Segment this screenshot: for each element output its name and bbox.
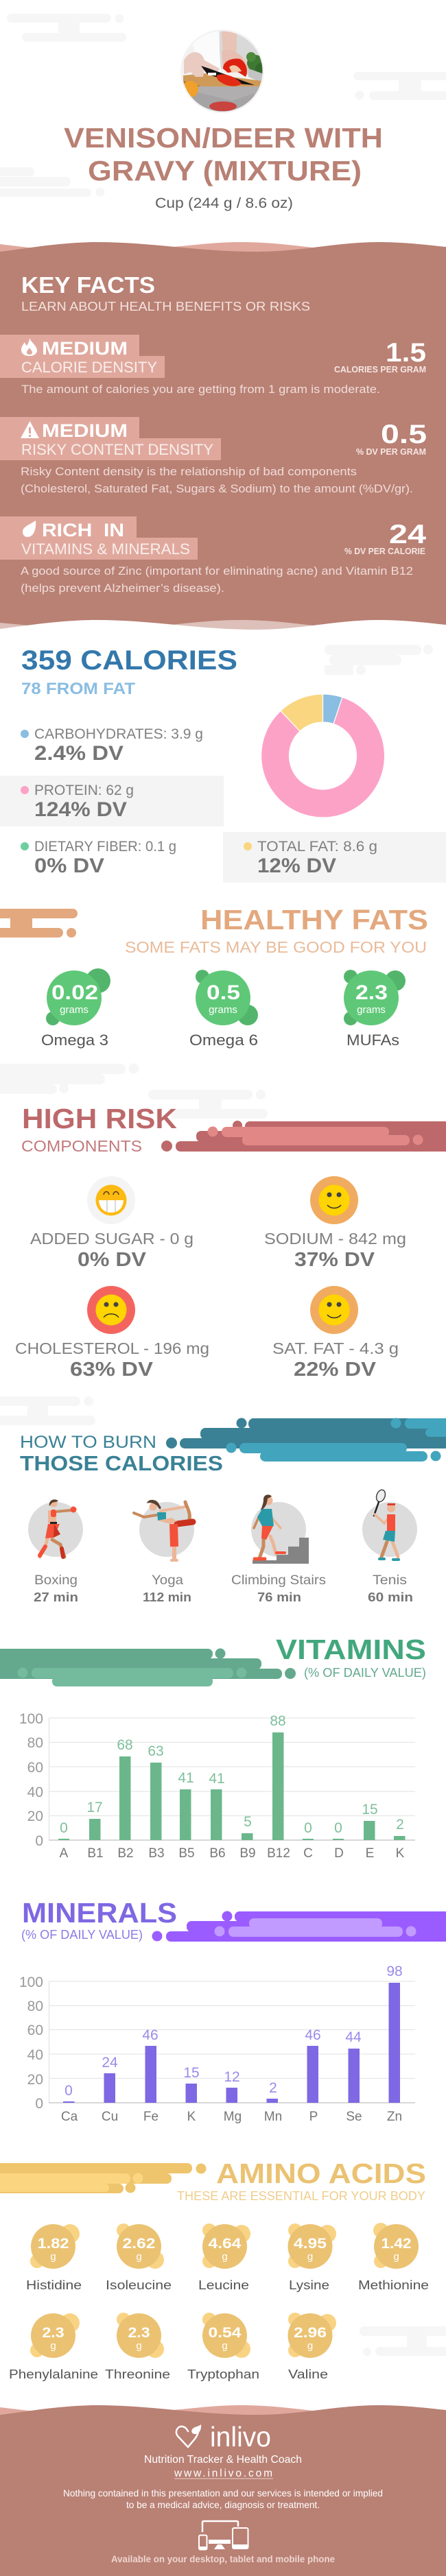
- healthy fats heading: SOME FATS MAY BE GOOD FOR YOU: [125, 938, 427, 956]
- bar chart: vitamins: 5: [244, 1814, 252, 1830]
- availability note: Available on your desktop, tablet and mobile phone: [111, 2553, 335, 2564]
- bar chart: minerals: Ca: [61, 2110, 78, 2124]
- icon: frowning face: [96, 1295, 126, 1325]
- healthy fats decoration: [0, 909, 78, 938]
- legend: total fat: [244, 839, 377, 877]
- omega 6 badge: 0.5: [207, 981, 240, 1004]
- bar chart: vitamins: [19, 1711, 415, 1861]
- bar chart: minerals: 100: [19, 1975, 43, 1990]
- amino: threonine: [105, 2313, 170, 2381]
- calories heading: 359 CALORIES: [21, 645, 237, 676]
- bar chart: vitamins: 63: [148, 1743, 164, 1759]
- panel: macronutrient legend: [0, 726, 446, 883]
- amino acids decoration: [0, 2163, 206, 2193]
- amino: histidine: g: [50, 2251, 56, 2263]
- amino: methionine: Methionine: [358, 2278, 429, 2292]
- bar chart: minerals: 60: [27, 2023, 43, 2038]
- bar chart: vitamins: B5: [178, 1846, 195, 1861]
- risk: sodium: SODIUM - 842 mg: [264, 1230, 406, 1248]
- bar chart: vitamins: B3: [148, 1846, 165, 1861]
- amino: phenylalanine: 2.3: [43, 2324, 64, 2341]
- legend: protein: [21, 783, 134, 821]
- bar chart: vitamins: 40: [27, 1785, 43, 1800]
- fact: risky content density: Risky Content density is the relationship of bad components: [21, 465, 357, 478]
- amino: lysine: [288, 2223, 336, 2292]
- panel: key facts: [0, 242, 446, 639]
- amino acids heading: AMINO ACIDS: [216, 2158, 426, 2189]
- amino: methionine: g: [393, 2251, 399, 2263]
- fact: calorie density: CALORIE DENSITY: [21, 359, 157, 376]
- amino: phenylalanine: g: [50, 2340, 56, 2352]
- high risk heading: COMPONENTS: [21, 1137, 142, 1155]
- vitamins decoration: [0, 1649, 296, 1686]
- risk: saturated fat: SAT. FAT - 4.3 g: [272, 1339, 399, 1357]
- fact: risky content density: [0, 417, 427, 495]
- icon: smiling face: [318, 1185, 350, 1215]
- bar chart: minerals: 0: [64, 2083, 73, 2099]
- amino: leucine: 4.64: [209, 2235, 242, 2252]
- amino: histidine: [26, 2224, 82, 2292]
- icon: yoga pose: [134, 1500, 193, 1560]
- risk: sodium: 37% DV: [294, 1249, 375, 1271]
- omega 3 badge: [41, 968, 110, 1049]
- key facts heading: LEARN ABOUT HEALTH BENEFITS OR RISKS: [21, 299, 310, 313]
- bar chart: vitamins: 0: [60, 1820, 68, 1836]
- panel: footer: [0, 2405, 446, 2576]
- minerals heading: (% OF DAILY VALUE): [21, 1928, 143, 1942]
- bar chart: vitamins: 68: [117, 1737, 133, 1753]
- disclaimer: [63, 2488, 383, 2510]
- bar chart: minerals: 12: [224, 2069, 240, 2085]
- bar chart: vitamins: B12: [267, 1846, 290, 1861]
- amino: leucine: [198, 2223, 250, 2292]
- legend: total fat: TOTAL FAT: 8.6 g: [257, 839, 377, 855]
- exercise: yoga: 112 min: [143, 1590, 191, 1604]
- vitamins heading: VITAMINS: [276, 1634, 426, 1665]
- burn calories heading: HOW TO BURN: [20, 1433, 156, 1452]
- exercise: tennis: [362, 1488, 417, 1604]
- amino: valine: 2.96: [294, 2324, 327, 2341]
- omega 6 badge: grams: [209, 1004, 237, 1016]
- amino acids heading: THESE ARE ESSENTIAL FOR YOUR BODY: [177, 2189, 425, 2203]
- bar chart: vitamins: 41: [209, 1771, 225, 1787]
- exercise: boxing: [28, 1499, 83, 1604]
- legend: carbohydrates: [21, 726, 203, 765]
- legend: dietary fiber: DIETARY FIBER: 0.1 g: [34, 839, 176, 855]
- bar chart: minerals: Fe: [143, 2110, 159, 2124]
- exercise: yoga: [134, 1500, 194, 1604]
- high risk decoration: [161, 1121, 446, 1152]
- disclaimer: to be a medical advice, diagnosis or treatment.: [126, 2499, 320, 2510]
- risk: cholesterol: CHOLESTEROL - 196 mg: [15, 1339, 209, 1357]
- exercise: climbing stairs: Climbing Stairs: [231, 1573, 326, 1588]
- omega 3 badge: 0.02: [51, 981, 98, 1004]
- risk: added sugar: ADDED SUGAR - 0 g: [30, 1230, 193, 1248]
- key facts heading: KEY FACTS: [21, 272, 155, 298]
- logo: inlivo: inlivo: [210, 2421, 271, 2453]
- bar chart: minerals: Cu: [102, 2110, 118, 2124]
- bar chart: vitamins: 80: [27, 1735, 43, 1751]
- amino: tryptophan: 0.54: [209, 2324, 242, 2341]
- fact: vitamins and minerals: VITAMINS & MINERALS: [21, 540, 190, 558]
- bar chart: minerals: 46: [142, 2027, 159, 2043]
- amino: valine: g: [307, 2340, 313, 2352]
- amino acids heading: [177, 2158, 426, 2203]
- amino: lysine: 4.95: [294, 2235, 327, 2252]
- disclaimer: Nothing contained in this presentation and our services is intended or implied: [63, 2488, 383, 2499]
- bar chart: minerals: 24: [102, 2055, 118, 2071]
- bar chart: vitamins: K: [396, 1846, 405, 1861]
- bar chart: vitamins: 2: [396, 1817, 404, 1833]
- icon: woman on stairs: [253, 1494, 309, 1564]
- legend: carbohydrates: 2.4% DV: [34, 742, 124, 765]
- MUFAs badge: [344, 970, 406, 1049]
- exercise: climbing stairs: 76 min: [257, 1590, 301, 1604]
- bar chart: minerals: 46: [305, 2027, 321, 2043]
- bar chart: minerals: 80: [27, 1999, 43, 2014]
- omega 3 badge: Omega 3: [41, 1031, 108, 1049]
- risk: saturated fat: [272, 1286, 399, 1381]
- icon: leaf: [23, 521, 36, 537]
- MUFAs badge: 2.3: [355, 981, 388, 1004]
- fact: vitamins and minerals: RICH IN: [42, 520, 124, 540]
- bar chart: minerals: Se: [346, 2110, 362, 2124]
- fact: vitamins and minerals: [0, 516, 426, 595]
- fact: vitamins and minerals: A good source of Zinc (important for eliminating acne) and Vitamin B12: [21, 564, 413, 577]
- amino: isoleucine: 2.62: [122, 2235, 156, 2252]
- exercise: climbing stairs: [231, 1494, 326, 1604]
- fact: risky content density: RISKY CONTENT DENSITY: [21, 441, 213, 458]
- icon: tennis player: [374, 1488, 399, 1560]
- exercise: yoga: Yoga: [152, 1573, 183, 1588]
- bar chart: minerals: 40: [27, 2047, 43, 2063]
- omega 3 badge: grams: [60, 1004, 89, 1016]
- icon: warning triangle: [21, 421, 39, 438]
- amino: phenylalanine: [9, 2313, 98, 2381]
- amino: threonine: Threonine: [105, 2367, 170, 2381]
- minerals heading: MINERALS: [22, 1897, 177, 1929]
- exercise: tennis: 60 min: [368, 1590, 413, 1604]
- bar chart: vitamins: B1: [87, 1846, 104, 1861]
- burn calories heading: [20, 1433, 223, 1475]
- bar chart: vitamins: E: [366, 1846, 374, 1861]
- healthy fats heading: HEALTHY FATS: [200, 904, 428, 935]
- bar chart: minerals: 44: [345, 2029, 362, 2045]
- amino: threonine: 2.3: [128, 2324, 150, 2341]
- tagline: Nutrition Tracker & Health Coach: [144, 2454, 302, 2466]
- amino: valine: Valine: [288, 2367, 328, 2381]
- exercise: boxing: Boxing: [34, 1573, 78, 1588]
- vitamins heading: (% OF DAILY VALUE): [304, 1666, 426, 1680]
- fact: vitamins and minerals: % DV PER CALORIE: [344, 546, 425, 556]
- icon: grinning face: [96, 1185, 126, 1215]
- amino: lysine: Lysine: [289, 2278, 329, 2292]
- amino: leucine: Leucine: [198, 2278, 249, 2292]
- risk: cholesterol: [15, 1286, 209, 1381]
- omega 6 badge: Omega 6: [189, 1031, 258, 1049]
- exercise: boxing: 27 min: [34, 1590, 78, 1604]
- title: GRAVY (MIXTURE): [88, 155, 362, 187]
- bar chart: vitamins: 0: [334, 1820, 342, 1836]
- bar chart: vitamins: 15: [362, 1802, 378, 1817]
- legend: protein: PROTEIN: 62 g: [34, 783, 134, 798]
- bar chart: vitamins: 20: [27, 1809, 43, 1824]
- bar chart: vitamins: 0: [304, 1820, 312, 1836]
- bar chart: vitamins: 88: [270, 1713, 286, 1729]
- bar chart: minerals: 2: [269, 2080, 277, 2096]
- amino: tryptophan: g: [222, 2340, 228, 2352]
- bar chart: vitamins: A: [60, 1846, 69, 1861]
- amino: valine: [288, 2313, 336, 2381]
- bar chart: vitamins: 41: [178, 1770, 194, 1786]
- high risk heading: HIGH RISK: [22, 1103, 177, 1134]
- amino: tryptophan: [187, 2313, 259, 2381]
- fact: risky content density: (Cholesterol, Saturated Fat, Sugars & Sodium) to the amount (%DV/gr).: [21, 482, 413, 495]
- fact: vitamins and minerals: 24: [389, 520, 426, 549]
- legend: dietary fiber: 0% DV: [34, 855, 104, 877]
- risk: sodium: [264, 1176, 406, 1271]
- food photo: [180, 29, 264, 113]
- key facts heading: [21, 272, 310, 313]
- burn calories heading: THOSE CALORIES: [20, 1451, 223, 1475]
- fact: vitamins and minerals: (helps prevent Alzheimer’s disease).: [21, 582, 224, 595]
- amino: tryptophan: Tryptophan: [187, 2367, 259, 2381]
- fact: risky content density: % DV PER GRAM: [356, 446, 426, 457]
- exercise: tennis: Tenis: [373, 1573, 407, 1588]
- amino: histidine: Histidine: [26, 2278, 82, 2292]
- bar chart: minerals: 20: [27, 2072, 43, 2088]
- fact: calorie density: The amount of calories you are getting from 1 gram is moderate.: [21, 383, 380, 396]
- fact: calorie density: MEDIUM: [42, 338, 128, 359]
- high risk heading: [21, 1103, 177, 1155]
- bar chart: vitamins: 0: [35, 1833, 43, 1849]
- bar chart: minerals: [19, 1964, 415, 2124]
- amino: threonine: g: [136, 2340, 142, 2352]
- amino: isoleucine: g: [136, 2251, 142, 2263]
- icon: smiling face: [318, 1295, 350, 1325]
- serving size: Cup (244 g / 8.6 oz): [155, 195, 293, 211]
- bar chart: minerals: P: [309, 2110, 318, 2124]
- icon: flame: [21, 338, 37, 356]
- bar chart: minerals: Mg: [224, 2110, 242, 2124]
- bar chart: minerals: 0: [35, 2096, 43, 2112]
- title: [64, 122, 383, 187]
- risk: saturated fat: 22% DV: [294, 1359, 377, 1381]
- title: VENISON/DEER WITH: [64, 122, 383, 154]
- legend: protein: 124% DV: [34, 798, 127, 821]
- risk: added sugar: 0% DV: [78, 1249, 147, 1271]
- bar chart: minerals: 98: [386, 1964, 403, 1979]
- fact: risky content density: MEDIUM: [42, 420, 128, 441]
- bar chart: vitamins: 60: [27, 1760, 43, 1776]
- bar chart: vitamins: 100: [19, 1711, 43, 1727]
- bar chart: vitamins: C: [303, 1846, 313, 1861]
- bar chart: minerals: Zn: [387, 2110, 402, 2124]
- amino: methionine: [358, 2223, 429, 2292]
- MUFAs badge: grams: [357, 1004, 386, 1016]
- amino: isoleucine: [106, 2223, 172, 2292]
- amino: histidine: 1.82: [37, 2235, 69, 2252]
- vitamins heading: [276, 1634, 426, 1680]
- amino: phenylalanine: Phenylalanine: [9, 2367, 98, 2381]
- risk: added sugar: [30, 1176, 193, 1271]
- omega 6 badge: [189, 970, 258, 1049]
- donut chart: [261, 694, 385, 818]
- website link: www.inlivo.com: [174, 2468, 272, 2479]
- minerals decoration: [152, 1911, 446, 1942]
- icon: boxer: [40, 1499, 77, 1557]
- bar chart: minerals: K: [187, 2110, 196, 2124]
- amino: leucine: g: [222, 2251, 228, 2263]
- bar chart: vitamins: B9: [239, 1846, 256, 1861]
- fact: calorie density: 1.5: [386, 338, 426, 368]
- amino: lysine: g: [307, 2251, 313, 2263]
- calories heading: 78 FROM FAT: [21, 680, 135, 698]
- fact: calorie density: CALORIES PER GRAM: [334, 364, 426, 374]
- amino: isoleucine: Isoleucine: [106, 2278, 172, 2292]
- icon: devices: [199, 2521, 248, 2550]
- fact: calorie density: [0, 335, 426, 396]
- healthy fats heading: [125, 904, 428, 956]
- legend: total fat: 12% DV: [257, 855, 336, 877]
- fact: risky content density: 0.5: [381, 420, 427, 449]
- calories heading: [21, 645, 237, 698]
- legend: carbohydrates: CARBOHYDRATES: 3.9 g: [34, 726, 203, 742]
- bar chart: vitamins: D: [334, 1846, 344, 1861]
- amino: methionine: 1.42: [382, 2235, 412, 2252]
- bar chart: vitamins: B2: [117, 1846, 134, 1861]
- MUFAs badge: MUFAs: [347, 1031, 399, 1049]
- risk: cholesterol: 63% DV: [70, 1359, 154, 1381]
- bar chart: vitamins: 17: [86, 1800, 103, 1815]
- logo: inlivo: [176, 2421, 271, 2453]
- burn calories decoration: [166, 1418, 446, 1462]
- bar chart: minerals: 15: [183, 2065, 200, 2081]
- bar chart: vitamins: B6: [209, 1846, 226, 1861]
- minerals heading: [21, 1897, 177, 1942]
- bar chart: minerals: Mn: [264, 2110, 282, 2124]
- legend: dietary fiber: [21, 839, 176, 877]
